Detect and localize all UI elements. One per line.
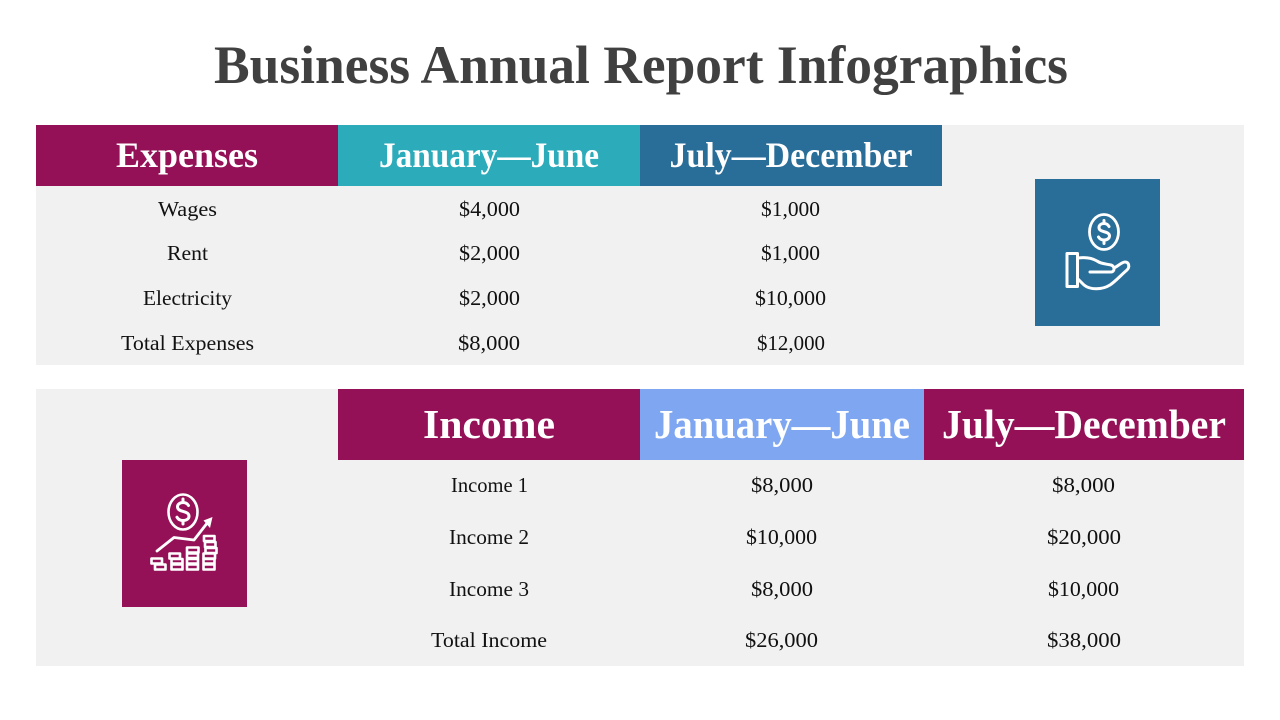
- row: income 1: [451, 473, 1115, 497]
- header: income January-June: January—June: [654, 401, 910, 447]
- row: total expenses: Total Expenses: [121, 331, 254, 355]
- row: rent: [167, 241, 820, 265]
- header: expenses: Expenses: [116, 135, 258, 175]
- icon: hand holding coin: [1035, 179, 1160, 326]
- row: wages: [158, 197, 820, 221]
- panel: income: [36, 389, 1244, 666]
- row: income 3: $10,000: [1048, 577, 1119, 601]
- row: rent: Rent: [167, 241, 208, 265]
- row: wages: Wages: [158, 197, 217, 221]
- header: income: Income: [423, 401, 555, 447]
- header: income: [338, 389, 640, 460]
- title: Business Annual Report Infographics: [214, 35, 1068, 95]
- row: income 1: $8,000: [1052, 473, 1115, 497]
- row: income 3: $8,000: [751, 577, 813, 601]
- header: income July-December: [924, 389, 1244, 460]
- row: wages: $1,000: [761, 197, 820, 221]
- row: electricity: $2,000: [459, 286, 520, 310]
- row: total income: [431, 628, 1121, 652]
- header: income January-June: [640, 389, 924, 460]
- row: total income: $38,000: [1047, 628, 1121, 652]
- header: expenses January-June: [338, 125, 640, 186]
- row: total income: Total Income: [431, 628, 547, 652]
- row: total expenses: [121, 331, 825, 355]
- header: income July-December: July—December: [942, 401, 1226, 447]
- row: income 2: Income 2: [449, 525, 529, 549]
- header: expenses January-June: January—June: [379, 135, 599, 175]
- row: total expenses: $12,000: [757, 331, 825, 355]
- row: income 1: Income 1: [451, 473, 528, 497]
- panel: expenses: [36, 125, 1244, 365]
- row: income 3: [449, 577, 1119, 601]
- row: wages: $4,000: [459, 197, 520, 221]
- row: total expenses: $8,000: [458, 331, 520, 355]
- header: expenses July-December: [640, 125, 942, 186]
- row: income 3: Income 3: [449, 577, 529, 601]
- row: income 2: $20,000: [1047, 525, 1121, 549]
- icon: rising coins: [122, 460, 247, 607]
- row: electricity: $10,000: [755, 286, 826, 310]
- row: electricity: Electricity: [143, 286, 232, 310]
- row: electricity: [143, 286, 826, 310]
- row: income 1: $8,000: [751, 473, 813, 497]
- header: expenses July-December: July—December: [670, 135, 913, 175]
- row: income 2: [449, 525, 1121, 549]
- row: total income: $26,000: [745, 628, 818, 652]
- row: income 2: $10,000: [746, 525, 817, 549]
- row: rent: $1,000: [761, 241, 820, 265]
- row: rent: $2,000: [459, 241, 520, 265]
- header: expenses: [36, 125, 338, 186]
